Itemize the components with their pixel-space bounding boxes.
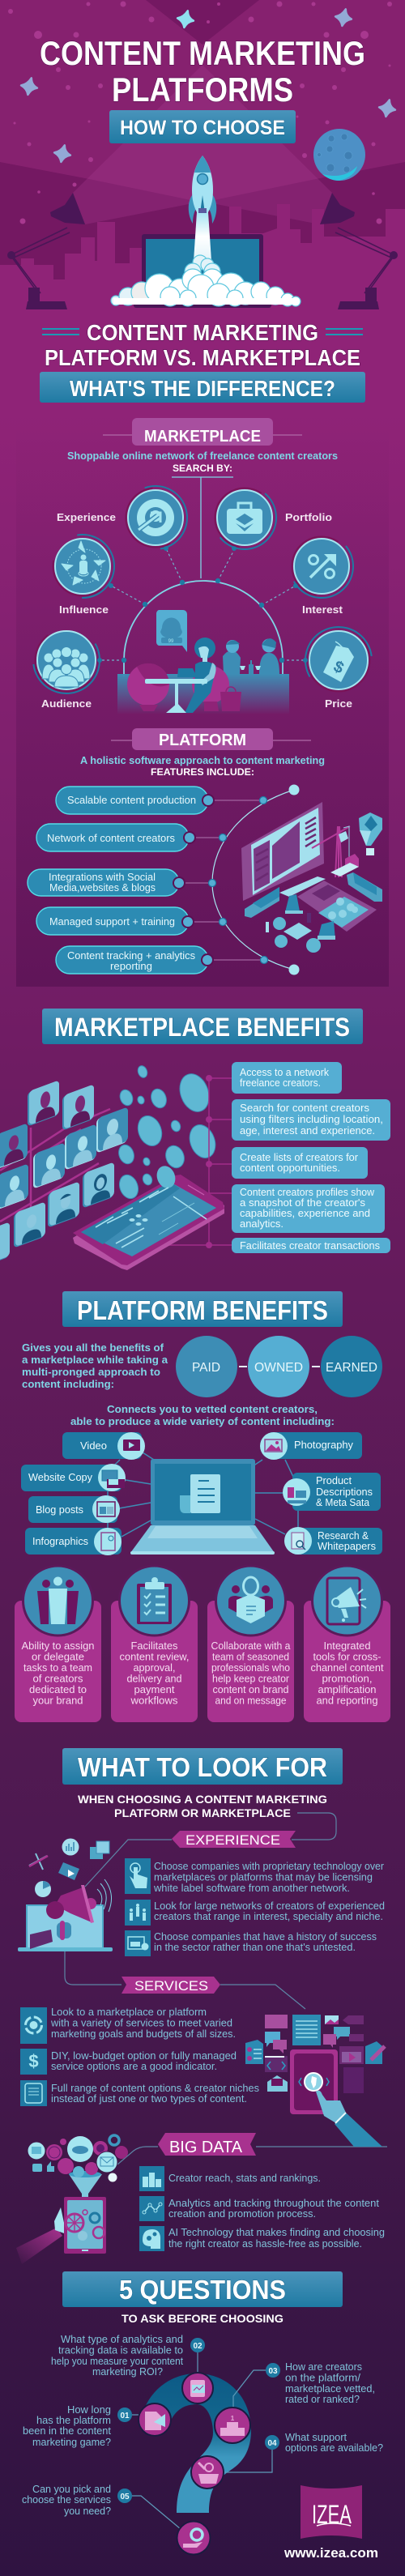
card: content review: workflows: [130, 1695, 178, 1706]
platform intro text: a marketplace while taking a: [22, 1354, 168, 1366]
content type: blog posts: [28, 1495, 120, 1523]
heading: what to look for: WHAT TO LOOK FOR: [78, 1752, 327, 1782]
platform intro text: Gives you all the benefits of: [22, 1341, 164, 1354]
benefit: creator profiles: analytics.: [240, 1218, 284, 1230]
stars and dots: [8, 2, 398, 224]
icon: portfolio: [200, 473, 289, 562]
big data tip 1: Creator reach, stats and rankings.: [168, 2173, 321, 2184]
paid owned earned circles: EARNED: [326, 1361, 377, 1375]
icon: price: $: [330, 658, 347, 677]
content type: blog posts: Blog posts: [36, 1503, 83, 1516]
illustration: rocket and smoke: [111, 156, 301, 306]
panel heading: marketplace: [103, 418, 302, 446]
question 2: help you measure your content: [51, 2356, 183, 2367]
question 1: How long: [67, 2404, 111, 2416]
ribbon: services: [122, 1977, 220, 1994]
illustration: creator network org chart: [0, 1080, 128, 1269]
question 5: you need?: [64, 2506, 111, 2517]
card: assign or delegate: dedicated to: [29, 1684, 87, 1695]
question 4: [191, 2432, 383, 2489]
question 4: 04: [267, 2439, 277, 2448]
card: integrated tools: promotion,: [322, 1674, 373, 1685]
icon: interest: [277, 522, 366, 611]
illustration: phone: [73, 1163, 224, 1270]
card: assign or delegate: [15, 1566, 101, 1722]
marketplace description: [67, 450, 338, 474]
website url: www.izea.com: [284, 2545, 378, 2561]
content link lines: [108, 1452, 298, 1537]
benefit: creator profiles: [232, 1184, 385, 1233]
feature pill: integrations: [28, 869, 185, 896]
heading: platform vs marketplace: CONTENT MARKETING: [87, 320, 318, 345]
platform intro text: content including:: [22, 1378, 114, 1390]
question 1: marketing game?: [32, 2437, 111, 2448]
feature pill: scalable content production: Scalable content production: [67, 794, 196, 806]
card: content review: [111, 1566, 198, 1722]
question 3: marketplace vetted,: [285, 2383, 375, 2395]
section connectors: [65, 1813, 387, 2164]
question 2: tracking data is available to: [58, 2344, 183, 2356]
paid owned earned circles: OWNED: [254, 1361, 303, 1375]
content type: research: Research &: [318, 1529, 369, 1542]
benefit: creator profiles: a snapshot of the creator's: [240, 1196, 366, 1209]
illustration: laptop with document: [130, 1459, 275, 1555]
benefit: search for creators: Search for content creators: [240, 1102, 369, 1114]
content type: website copy: [21, 1464, 126, 1491]
platform description: [80, 754, 325, 778]
heading: platform vs marketplace: PLATFORM VS. MARKETPLACE: [45, 345, 360, 370]
card: content review: content review,: [120, 1651, 190, 1662]
ribbon: experience: [172, 1831, 296, 1848]
card: collaborate: help keep creator: [212, 1674, 289, 1685]
services tip 3: instead of just one or two types of content.: [51, 2093, 247, 2105]
hero background: [0, 0, 405, 332]
question 3: 03: [268, 2367, 278, 2376]
illustration: services tablet and content: [245, 2015, 385, 2147]
connects text: able to produce a wide variety of content including:: [70, 1415, 335, 1427]
card: collaborate: [207, 1566, 294, 1722]
benefit: creator profiles: Content creators profiles show: [240, 1186, 375, 1198]
feature pill: scalable content production: [56, 787, 214, 814]
services tip 2: [20, 2049, 237, 2075]
benefit: search for creators: [232, 1099, 390, 1141]
question 5: Can you pick and: [32, 2484, 111, 2495]
experience tip 3: [125, 1930, 377, 1956]
card: assign or delegate: your brand: [32, 1695, 83, 1706]
services tip 1: with a variety of services to meet varied: [50, 2017, 232, 2028]
connector: benefit list: [162, 1076, 232, 1247]
question 1: [23, 2403, 171, 2448]
question 3: How are creators: [285, 2361, 362, 2373]
benefit: search for creators: using filters including location,: [240, 1113, 383, 1125]
benefit: access to network: freelance creators.: [240, 1077, 321, 1089]
services tip 2: $: [28, 2051, 39, 2071]
illustration: isometric platform factory: [241, 802, 382, 953]
marketplace description: SEARCH BY:: [173, 463, 232, 474]
experience tip 1: marketplaces or platforms that may be licensing: [154, 1871, 373, 1883]
services tip 2: service options are a good indicator.: [51, 2061, 217, 2072]
card: integrated tools: and reporting: [316, 1695, 378, 1706]
question 1: 01: [120, 2412, 130, 2420]
label: experience: Experience: [57, 511, 116, 523]
content type: video: [62, 1432, 145, 1460]
panel heading: platform: [111, 728, 311, 750]
content type: infographics: [25, 1528, 122, 1555]
big data tip 2: creation and promotion process.: [168, 2208, 316, 2220]
benefit: access to network: Access to a network: [240, 1066, 329, 1078]
heading: 5 questions: [62, 2271, 343, 2307]
card: collaborate: professionals who: [211, 1662, 290, 1674]
question mark graphic: [142, 2373, 251, 2513]
heading: marketplace benefits: MARKETPLACE BENEFITS: [54, 1013, 350, 1042]
card: collaborate: team of seasoned: [212, 1651, 289, 1662]
experience tip 1: white label software from another network.: [153, 1883, 350, 1894]
label: influence: Influence: [59, 603, 109, 616]
question 4: What support: [285, 2432, 347, 2443]
content type: website copy: Website Copy: [28, 1471, 92, 1483]
services tip 3: Full range of content options & creator niches: [51, 2083, 259, 2094]
question 2: 02: [193, 2342, 202, 2351]
icon: audience: [21, 615, 112, 706]
label: interest: Interest: [302, 603, 343, 616]
experience tip 2: [125, 1900, 385, 1926]
subheading: to ask before choosing: TO ASK BEFORE CHOOSING: [122, 2312, 284, 2325]
question 5: 05: [120, 2493, 130, 2501]
card: integrated tools: amplification: [318, 1684, 377, 1695]
benefit: create lists: Create lists of creators for: [240, 1151, 359, 1163]
illustration: cafe scene: 99: [168, 639, 174, 644]
card: collaborate: content on brand: [212, 1684, 289, 1695]
title: PLATFORMS: [112, 70, 293, 109]
services tip 3: [20, 2080, 259, 2106]
card: content review: payment: [134, 1684, 175, 1695]
platform intro text: multi-pronged approach to: [22, 1366, 160, 1378]
panel: comparison background: [16, 421, 389, 987]
content type: photography: [260, 1432, 362, 1460]
question 4: options are available?: [285, 2442, 383, 2454]
question 3: 1: [231, 2415, 235, 2422]
card: integrated tools: [304, 1566, 390, 1722]
banner: what's the difference: WHAT'S THE DIFFERENCE?: [70, 376, 335, 401]
card: collaborate: Collaborate with a: [211, 1640, 291, 1652]
question 5: choose the services: [22, 2494, 111, 2506]
feature pill: network of content creators: Network of content creators: [47, 832, 175, 844]
card: collaborate: and on message: [215, 1695, 287, 1706]
marketplace connectors: [97, 477, 308, 676]
big data tip 2: [139, 2196, 380, 2221]
question 3: rated or ranked?: [285, 2394, 360, 2405]
illustration: right desk lamp: [320, 193, 398, 309]
experience tip 2: creators that range in interest, specialty and niche.: [154, 1911, 383, 1922]
big data tip 3: AI Technology that makes finding and choosing: [168, 2227, 385, 2238]
benefit: creator profiles: capabilities, experience and: [240, 1207, 370, 1219]
card: content review: approval,: [133, 1662, 175, 1674]
connects text: Connects you to vetted content creators,: [107, 1403, 318, 1415]
ribbon: big data: [158, 2133, 256, 2156]
marketplace description: Shoppable online network of freelance content creators: [67, 450, 338, 462]
feature pill: managed support: Managed support + training: [49, 915, 175, 928]
question 2: marketing ROI?: [92, 2366, 163, 2378]
illustration: big data funnel and tablet: [16, 2135, 128, 2264]
question connectors: [132, 2352, 272, 2529]
illustration: laptop: [134, 234, 271, 308]
platform description: FEATURES INCLUDE:: [151, 766, 254, 778]
feature pill: content tracking: reporting: [110, 960, 152, 972]
question 3: [215, 2361, 375, 2443]
label: portfolio: Portfolio: [285, 511, 332, 523]
platform description: A holistic software approach to content marketing: [80, 754, 325, 766]
content type: video: Video: [80, 1439, 107, 1452]
feature pill: integrations: Integrations with Social: [49, 871, 156, 883]
experience tip 2: Look for large networks of creators of experienced: [154, 1900, 385, 1912]
card: integrated tools: Integrated: [324, 1640, 371, 1652]
experience tip 3: in the sector rather than one that's untested.: [154, 1942, 356, 1953]
illustration: cafe scene: [117, 610, 289, 714]
feature pill: network of content creators: [36, 824, 195, 851]
feature pill: managed support: [36, 907, 194, 935]
question 1: been in the content: [23, 2425, 112, 2437]
feature pill: content tracking: [56, 946, 213, 974]
big data tip 3: [139, 2226, 385, 2251]
services tip 1: Look to a marketplace or platform: [51, 2007, 207, 2018]
content type: photography: Photography: [294, 1439, 353, 1451]
card: assign or delegate: tasks to a team: [23, 1662, 92, 1674]
platform intro text: [22, 1341, 168, 1390]
paid owned earned circles: [176, 1336, 382, 1397]
panel heading: platform: PLATFORM: [159, 731, 246, 749]
subheading: when choosing: [78, 1793, 327, 1819]
experience tip 3: Choose companies that have a history of success: [154, 1931, 377, 1943]
label: audience: Audience: [41, 697, 92, 710]
content type: product descriptions: Product: [316, 1474, 352, 1486]
content type: product descriptions: Descriptions: [316, 1486, 373, 1498]
experience tip 1: [125, 1858, 384, 1894]
card: content review: delivery and: [126, 1674, 182, 1685]
experience tip 1: Choose companies with proprietary technology over: [154, 1861, 384, 1872]
feature connector arc: [179, 784, 300, 975]
subtitle banner: how to choose: [109, 110, 296, 143]
icon: influence: [41, 525, 124, 608]
subheading: when choosing: WHEN CHOOSING A CONTENT MARKETING: [78, 1793, 327, 1806]
benefit: access to network: [232, 1062, 342, 1094]
subheading: when choosing: PLATFORM OR MARKETPLACE: [114, 1807, 291, 1819]
question 2: [51, 2334, 213, 2403]
illustration: floating content bubbles: [116, 1064, 220, 1201]
subtitle banner: how to choose: HOW TO CHOOSE: [120, 117, 285, 139]
heading: platform vs marketplace: [42, 320, 363, 370]
icon: moon: [313, 129, 365, 181]
card: integrated tools: tools for cross-: [313, 1651, 381, 1662]
feature pill: content tracking: Content tracking + analytics: [67, 949, 195, 962]
card: assign or delegate: of creators: [32, 1674, 83, 1685]
content type: research: Whitepapers: [318, 1540, 376, 1552]
logo: IZEA: IZEA: [312, 2500, 352, 2529]
content type: product descriptions: & Meta Sata: [316, 1496, 370, 1508]
question 1: has the platform: [36, 2415, 111, 2426]
benefit: create lists: content opportunities.: [240, 1162, 340, 1174]
content type: product descriptions: [283, 1473, 381, 1511]
feature pill: integrations: Media,websites & blogs: [49, 881, 156, 893]
ribbon: big data: BIG DATA: [169, 2139, 243, 2156]
label: price: Price: [325, 697, 352, 710]
illustration: megaphone and laptop: [18, 1839, 113, 1951]
card: assign or delegate: Ability to assign: [21, 1640, 95, 1652]
question 2: What type of analytics and: [61, 2334, 183, 2345]
icon: experience: [115, 477, 196, 558]
heading: platform benefits: PLATFORM BENEFITS: [77, 1295, 328, 1325]
benefit: creator transactions: Facilitates creator transactions: [240, 1239, 380, 1252]
services tip 1: [20, 2007, 236, 2044]
services tip 1: marketing goals and budgets of all sizes.: [51, 2028, 236, 2040]
card: integrated tools: channel content: [311, 1662, 384, 1674]
benefit: search for creators: age, interest and experience.: [240, 1124, 375, 1137]
connects text: [70, 1403, 335, 1427]
card: content review: Facilitates: [131, 1640, 178, 1652]
card: assign or delegate: or delegate: [32, 1651, 84, 1662]
big data tip 3: the right creator as hassle-free as possible.: [168, 2238, 362, 2250]
big data tip 2: Analytics and tracking throughout the content: [168, 2198, 380, 2209]
ribbon: services: SERVICES: [134, 1978, 208, 1994]
question 3: on the platform/: [285, 2372, 361, 2383]
illustration: left desk lamp: [7, 193, 85, 309]
ribbon: experience: EXPERIENCE: [185, 1832, 280, 1848]
content type: infographics: Infographics: [32, 1535, 88, 1547]
heading: 5 questions: 5 QUESTIONS: [119, 2275, 286, 2305]
question 5: [22, 2484, 211, 2555]
paid owned earned circles: PAID: [192, 1361, 220, 1375]
content type: research: [284, 1527, 382, 1555]
services tip 2: DIY, low-budget option or fully managed: [51, 2050, 237, 2062]
title: [40, 34, 365, 109]
big data tip 1: [139, 2166, 321, 2191]
logo: IZEA: [301, 2485, 362, 2539]
icon: price: [293, 615, 384, 706]
panel heading: marketplace: MARKETPLACE: [144, 428, 261, 446]
benefit: create lists: [232, 1147, 368, 1179]
